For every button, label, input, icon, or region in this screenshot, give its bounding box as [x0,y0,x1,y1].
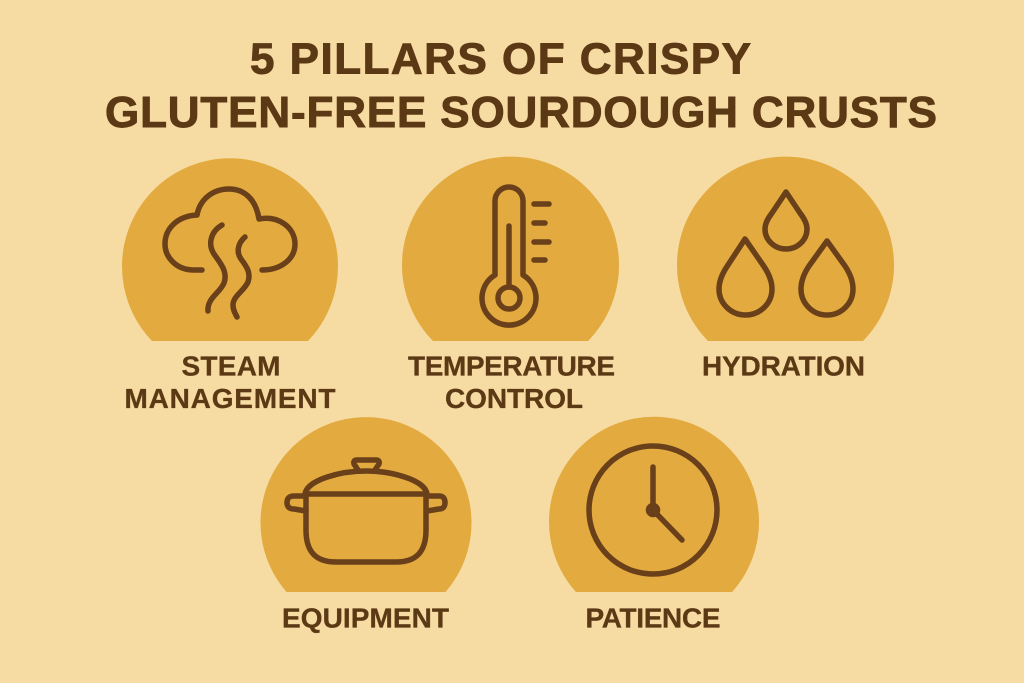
label: temperature control [408,350,615,414]
label: patience: PATIENCE [586,602,720,634]
icon circle: equipment [260,417,472,592]
label: hydration: HYDRATION [702,350,865,382]
label: steam management: STEAM [182,350,280,382]
icon: water drops [719,192,853,315]
icon circle: hydration [677,157,894,341]
title: 5 PILLARS OF CRISPY [250,34,751,84]
icon: steam cloud [165,189,295,317]
panel: equipment [260,417,472,634]
icon circle: temperature [402,157,619,341]
icon: clock [589,446,717,574]
panel: patience [549,417,759,634]
label: temperature control: TEMPERATURE [408,350,615,382]
label: temperature control: CONTROL [445,383,583,414]
label: steam management: MANAGEMENT [124,383,336,414]
panel: temperature control [402,157,619,414]
title [105,34,937,137]
icon: thermometer [482,187,549,325]
icon: pot [287,460,445,562]
panel: hydration [677,157,894,382]
panel: steam management [122,158,338,414]
title: GLUTEN-FREE SOURDOUGH CRUSTS [105,88,937,137]
label: steam management [124,350,336,414]
icon circle: patience [549,417,759,592]
icon circle: steam [122,158,338,341]
label: equipment: EQUIPMENT [282,602,449,634]
